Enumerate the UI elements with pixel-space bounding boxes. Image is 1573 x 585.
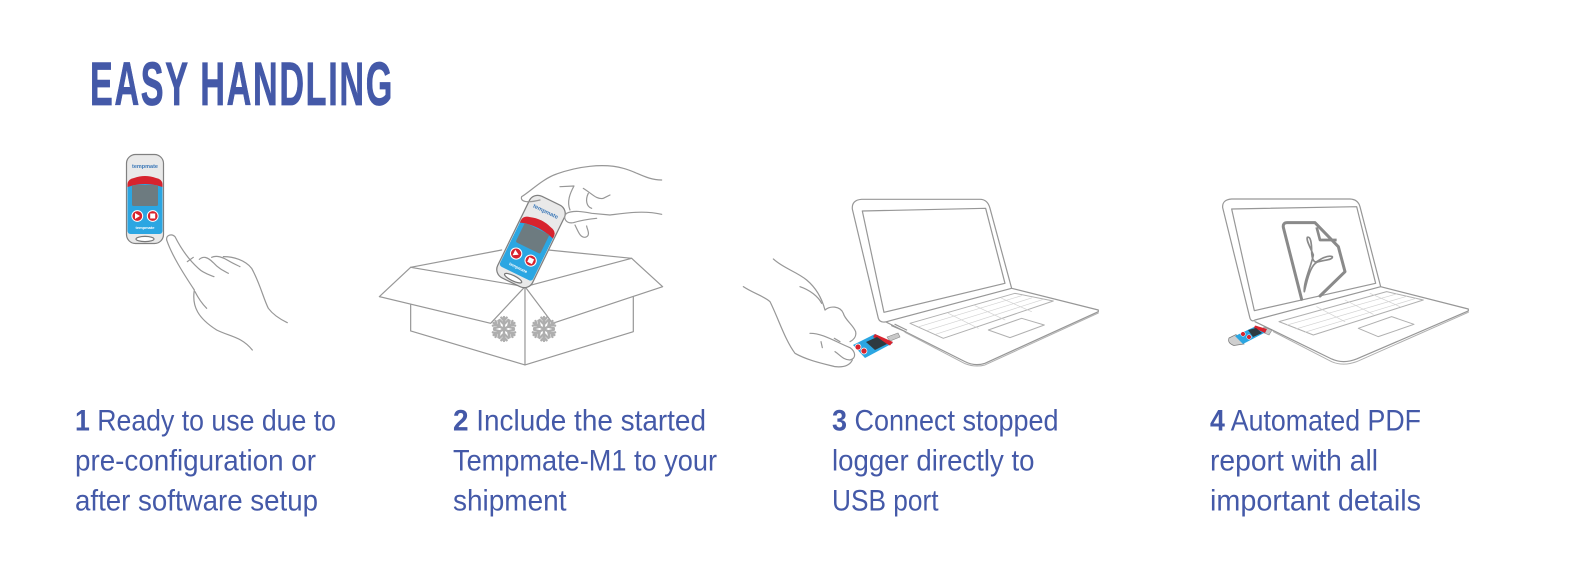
step 1 text: 1 Ready to use due to: [75, 404, 336, 438]
step 1 text: [75, 404, 336, 518]
icon: laptop: [1223, 199, 1468, 364]
step 4 text: [1210, 404, 1421, 518]
step 1 text: pre-configuration or: [75, 444, 316, 478]
panel: step 3: [743, 199, 1098, 517]
step 3 text: logger directly to: [832, 444, 1034, 478]
icon: hand holding logger: [521, 166, 662, 237]
step 2 text: Tempmate-M1 to your: [453, 444, 717, 478]
icon: hand holding logger: [743, 259, 856, 367]
step 2 text: 2 Include the started: [453, 404, 706, 438]
icon: open cardboard box: [379, 250, 663, 365]
icon: PDF document: [1283, 223, 1345, 299]
icon: logger plugged toward USB: [853, 333, 900, 358]
step 3 text: [832, 404, 1058, 518]
step 4 text: report with all: [1210, 444, 1378, 478]
icon: temperature logger: [126, 154, 164, 244]
step 3 text: 3 Connect stopped: [832, 404, 1058, 438]
icon: pointing hand: [167, 235, 287, 350]
step 2 text: [453, 404, 717, 518]
panel: step 4: [1210, 199, 1468, 518]
icon: logger plugged into USB port: [1229, 326, 1272, 346]
step 1 text: after software setup: [75, 484, 318, 518]
step 2 text: shipment: [453, 484, 567, 518]
icon: laptop: [852, 199, 1098, 366]
step 4 text: 4 Automated PDF: [1210, 404, 1421, 438]
title: EASY HANDLING: [90, 50, 394, 118]
icon: tilted temperature logger: [494, 192, 568, 291]
panel: step 1: [75, 154, 336, 518]
step 4 text: important details: [1210, 484, 1421, 518]
panel: step 2: [379, 166, 717, 517]
step 3 text: USB port: [832, 484, 939, 518]
icon: snowflakes: [491, 317, 557, 341]
